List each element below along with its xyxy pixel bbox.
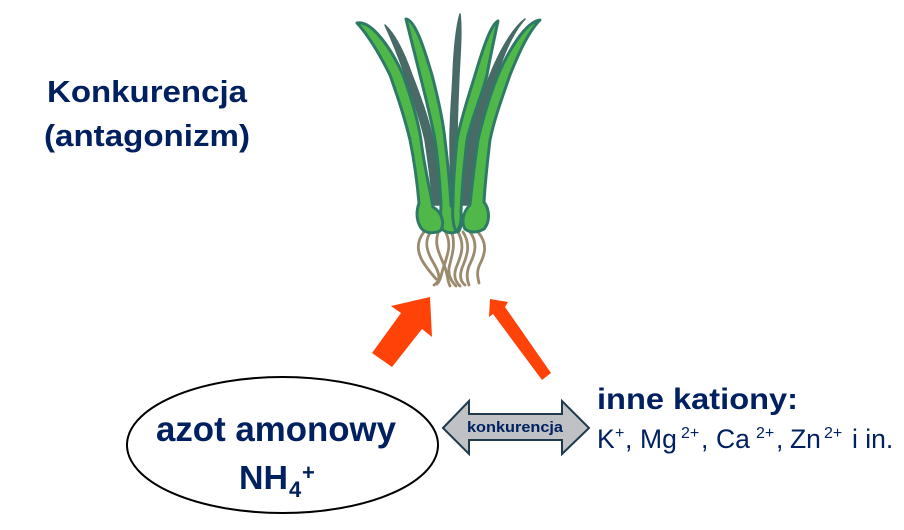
ellipse: ammonium nitrogen: NH: [239, 459, 288, 496]
text: cation list: ,: [776, 424, 783, 454]
text: cation list: i in.: [852, 424, 893, 454]
title: [44, 74, 250, 153]
text: cation list: Mg: [640, 424, 677, 454]
text: other cations heading: inne kationy:: [597, 383, 798, 416]
text: cation list: Ca: [716, 424, 750, 454]
text: cation list: ,: [625, 424, 632, 454]
double arrow: competition: konkurencja: [467, 419, 564, 436]
ellipse: ammonium nitrogen: [127, 377, 438, 513]
title: Konkurencja: [47, 74, 248, 109]
ellipse: ammonium nitrogen: azot amonowy: [156, 410, 397, 449]
double arrow: competition: [443, 401, 589, 454]
text: cation list: 2+: [756, 425, 774, 442]
text: cation list: ,: [701, 424, 708, 454]
text: cation list: Zn: [790, 424, 821, 454]
plant green leaves: [357, 19, 540, 233]
ellipse: ammonium nitrogen: +: [302, 460, 315, 485]
arrow: large ammonium uptake: [372, 297, 432, 367]
icon: plant with roots: [357, 14, 540, 286]
text: cation list: 2+: [681, 425, 699, 442]
text: cation list: K: [597, 424, 615, 454]
text: cation list: +: [615, 425, 624, 442]
ellipse: ammonium nitrogen: 4: [289, 477, 302, 502]
plant dark leaves: [385, 14, 525, 212]
title: (antagonizm): [44, 118, 250, 153]
arrow: small cation uptake: [489, 299, 551, 380]
plant roots: [418, 232, 485, 286]
text: cation list: 2+: [824, 425, 842, 442]
